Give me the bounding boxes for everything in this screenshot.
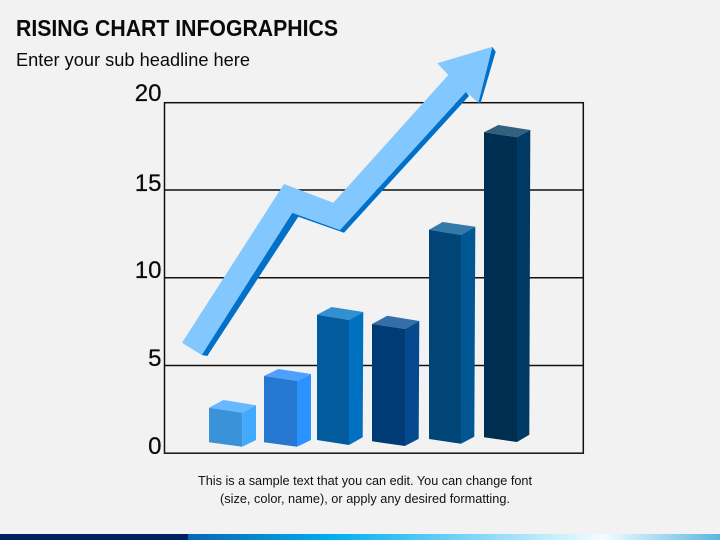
bar 1 <box>209 400 256 447</box>
title: RISING CHART INFOGRAPHICS <box>16 15 338 41</box>
y-axis labels: 20 <box>135 80 162 107</box>
bar 2 <box>264 369 311 447</box>
subtitle: Enter your sub headline here <box>16 50 250 70</box>
chart frame and gridlines <box>164 103 583 453</box>
caption: (size, color, name), or apply any desired formatting. <box>220 492 510 506</box>
icon: rising arrow <box>182 47 496 356</box>
caption <box>198 474 533 506</box>
bar 4 <box>372 316 419 446</box>
bar 5 <box>429 222 475 444</box>
y-axis labels: 10 <box>135 257 162 284</box>
footer bar <box>0 534 720 540</box>
y-axis labels <box>135 80 162 460</box>
y-axis labels: 5 <box>148 345 162 372</box>
bar 6 <box>484 125 530 442</box>
y-axis labels: 15 <box>135 170 162 197</box>
y-axis labels: 0 <box>148 433 162 460</box>
chart <box>135 47 583 460</box>
bar 3 <box>317 307 363 445</box>
caption: This is a sample text that you can edit. You can change font <box>198 474 533 488</box>
